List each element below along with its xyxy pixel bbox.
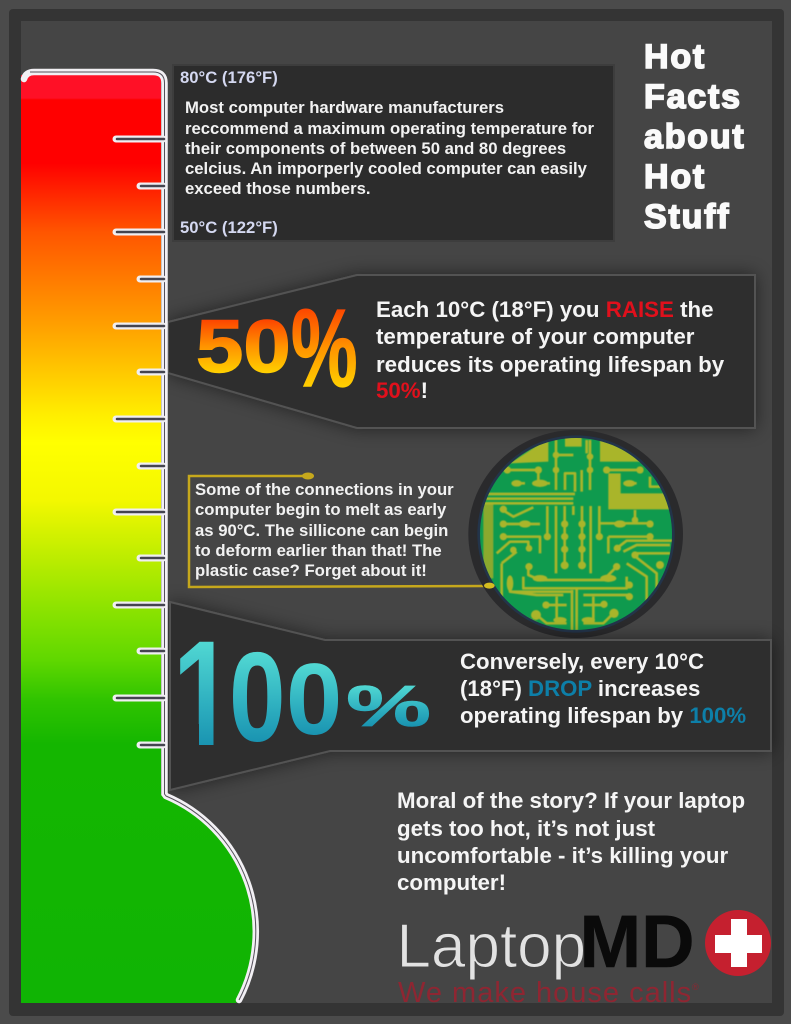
- melting paragraph: [195, 480, 454, 580]
- moral of the story: computer!: [397, 870, 506, 895]
- melting paragraph: as 90°C. The sillicone can begin: [195, 521, 448, 540]
- melting paragraph: to deform earlier than that! The: [195, 541, 442, 560]
- yellow leader line: [189, 476, 488, 587]
- temperature paragraph: Most computer hardware manufacturers: [185, 98, 504, 117]
- 50 percent description: Each 10°C (18°F) you RAISE the: [376, 297, 714, 322]
- title: Facts: [644, 78, 742, 116]
- label: 80C: 80°C (176°F): [180, 68, 278, 87]
- leader dot on circuit: [484, 583, 495, 589]
- big 50 percent figure: 50: [196, 305, 291, 388]
- moral of the story: uncomfortable - it’s killing your: [397, 843, 728, 868]
- icon: circuit board magnifier: [468, 430, 683, 638]
- title: Hot: [644, 158, 706, 196]
- 100 percent description: [460, 649, 746, 728]
- big 100 percent figure: [180, 642, 430, 745]
- callout: 50 percent: [168, 275, 755, 428]
- icon: red cross: [705, 910, 771, 976]
- title: about: [644, 118, 746, 156]
- label: 50C: 50°C (122°F): [180, 218, 278, 237]
- big 100 percent figure: 0: [286, 644, 342, 756]
- tagline: ®: [692, 982, 700, 992]
- logo wordmark light: Laptop: [396, 912, 586, 981]
- 100 percent description: Conversely, every 10°C: [460, 649, 704, 674]
- temperature paragraph: their components of between 50 and 80 degrees: [185, 139, 566, 158]
- melting paragraph: plastic case? Forget about it!: [195, 561, 427, 580]
- thermometer fill: [21, 75, 255, 1003]
- title: [644, 38, 746, 236]
- callout shape: [168, 275, 755, 428]
- leader dot top: [302, 472, 314, 480]
- thermometer tick marks: [116, 139, 164, 745]
- big 50 percent figure: [196, 287, 358, 409]
- moral of the story: [397, 788, 745, 895]
- temperature paragraph: exceed those numbers.: [185, 179, 370, 198]
- big 100 percent figure: 1: [172, 610, 235, 778]
- temperature paragraph: reccommend a maximum operating temperature for: [185, 119, 594, 138]
- 100 percent description: (18°F) DROP increases: [460, 676, 700, 701]
- temperature paragraph: [185, 98, 594, 198]
- 50 percent description: temperature of your computer: [376, 324, 695, 349]
- title: Stuff: [644, 198, 730, 236]
- 50 percent description: 50%!: [376, 378, 428, 403]
- moral of the story: Moral of the story? If your laptop: [397, 788, 745, 813]
- panel: recommended temperature range: [173, 65, 614, 241]
- melting paragraph: computer begin to melt as early: [195, 500, 447, 519]
- 50 percent description: reduces its operating lifespan by: [376, 352, 725, 377]
- callout shape: [170, 602, 771, 790]
- big 50 percent figure: %: [291, 287, 358, 409]
- big 100 percent figure: %: [346, 673, 431, 738]
- temperature paragraph: celcius. An imporperly cooled computer can easily: [185, 159, 588, 178]
- 100 percent description: operating lifespan by 100%: [460, 703, 746, 728]
- callout: melting connections: [189, 472, 488, 587]
- callout: 100 percent: [170, 602, 771, 790]
- thermometer outline: [24, 72, 256, 1000]
- 50 percent description: [376, 297, 725, 403]
- melting paragraph: Some of the connections in your: [195, 480, 454, 499]
- tagline: We make house calls: [398, 977, 692, 1009]
- moral of the story: gets too hot, it’s not just: [397, 816, 656, 841]
- title: Hot: [644, 38, 706, 76]
- logo: LaptopMD: [396, 900, 771, 1009]
- thermometer: [21, 72, 256, 1003]
- big 100 percent figure: 0: [229, 627, 286, 769]
- logo wordmark bold: MD: [580, 900, 695, 983]
